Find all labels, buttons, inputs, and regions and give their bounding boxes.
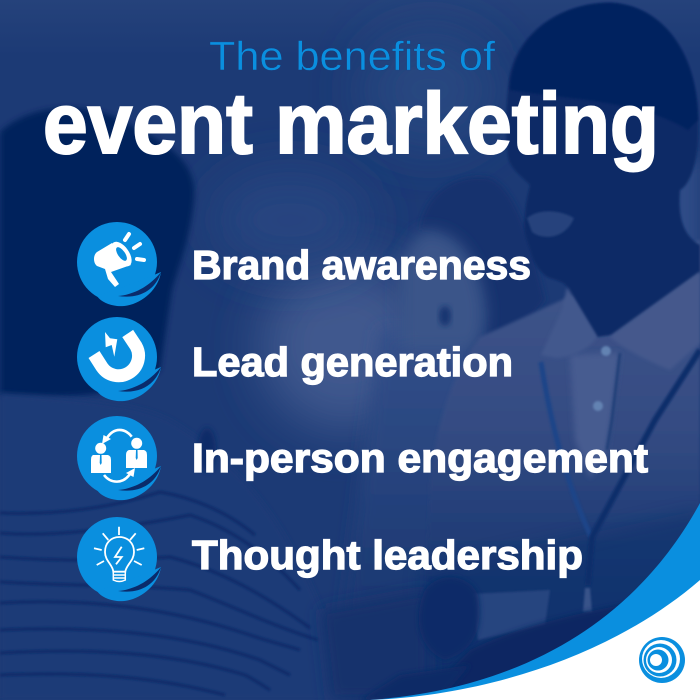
- foreground person: left, striped shirt: [0, 393, 350, 700]
- icon: light bulb: [77, 517, 161, 601]
- polo collar: [541, 287, 597, 358]
- lower centre shadow: [320, 590, 430, 700]
- benefit: brand awareness: [77, 222, 531, 306]
- white corner: [370, 580, 700, 700]
- foreground person: left, dark hair: [0, 108, 194, 397]
- label: Brand awareness: [192, 242, 531, 288]
- foreground person: right, polo shirt: [422, 240, 700, 700]
- benefit: lead generation: [77, 317, 513, 401]
- cup: [470, 590, 550, 640]
- lanyard: [541, 362, 591, 537]
- polo placket: [570, 353, 620, 478]
- label: In-person engagement: [192, 435, 648, 481]
- benefit: in-person engagement: [77, 416, 648, 500]
- head and neck: [506, 3, 700, 337]
- icon: megaphone: [77, 222, 161, 306]
- placket edge: [607, 353, 620, 450]
- background person: blurred head: [420, 177, 545, 345]
- blue swoosh band: [370, 503, 700, 700]
- background wall panel: [340, 330, 470, 640]
- hair: [510, 3, 698, 130]
- label: Lead generation: [192, 339, 513, 385]
- lips: [527, 211, 574, 237]
- icon: two people with arrows: [77, 416, 161, 500]
- title: line two: event marketing: [43, 76, 659, 172]
- polo collar right flap: [610, 272, 700, 370]
- icon: magnet: [77, 317, 161, 401]
- corner swoosh: [370, 503, 700, 700]
- hands: [419, 577, 479, 660]
- shirt stripes: [0, 492, 318, 695]
- lower shirt shadow: [420, 510, 700, 700]
- logo: spiral: [639, 637, 685, 683]
- label: Thought leadership: [192, 532, 583, 578]
- buttons: [601, 346, 611, 356]
- title: line one: The benefits of: [209, 33, 496, 79]
- benefit: thought leadership: [77, 517, 583, 601]
